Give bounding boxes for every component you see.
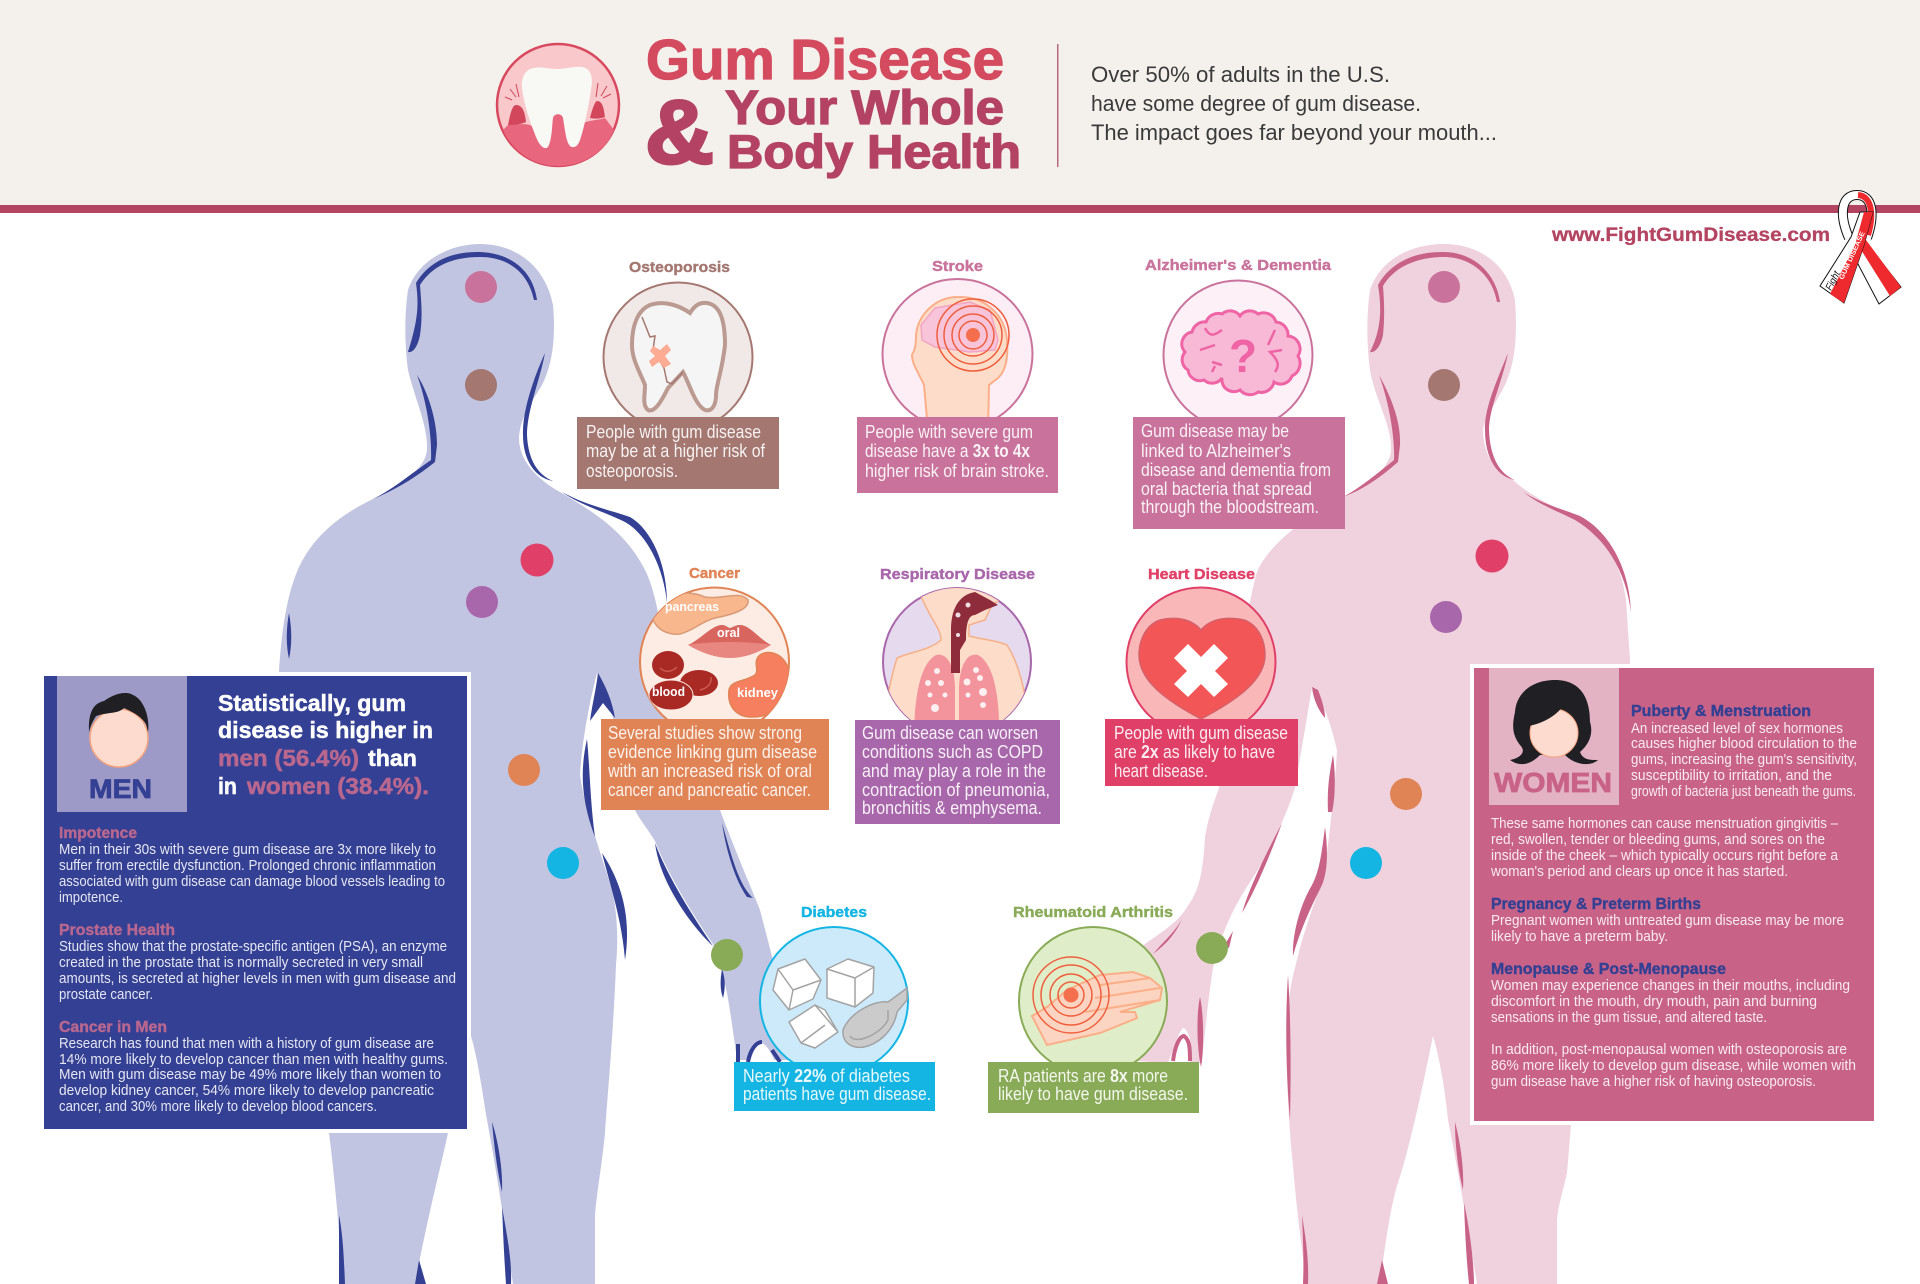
title: Your Whole: [725, 82, 1004, 135]
icon: man avatar: MEN: [89, 774, 152, 804]
text: prostate health: prostate cancer.: [59, 987, 153, 1003]
text: menopause: Women may experience changes in their mouths, including: [1491, 978, 1850, 994]
icon: man avatar: [57, 676, 187, 812]
icon: woman avatar: [1489, 668, 1619, 805]
text: puberty and menstruation: gums, increasing the gum's sensitivity,: [1631, 752, 1857, 768]
text: prostate health: Studies show that the prostate-specific antigen (PSA), an enzyme: [59, 939, 447, 955]
panel: respiratory disease: Respiratory Disease: [880, 566, 1035, 583]
panel: cancer: oral: [717, 625, 740, 640]
text: menstruation gingivitis: [1490, 816, 1839, 880]
text: pregnancy: Pregnancy & Preterm Births: [1491, 896, 1701, 913]
panel: rheumatoid arthritis: RA patients are 8x more: [998, 1066, 1168, 1086]
text: puberty and menstruation: growth of bacteria just beneath the gums.: [1631, 784, 1856, 800]
icon: tooth with receding gums: [497, 44, 619, 166]
text: puberty and menstruation: An increased level of sex hormones: [1631, 721, 1843, 737]
panel: alzheimer's and dementia: [1133, 257, 1345, 529]
text: prostate health: amounts, is secreted at higher levels in men with gum disease and: [59, 971, 456, 987]
panel: stroke: [857, 258, 1058, 493]
panel: stroke: disease have a 3x to 4x: [865, 441, 1030, 461]
panel: respiratory disease: conditions such as COPD: [862, 742, 1043, 762]
panel: alzheimer's and dementia: disease and dementia from: [1141, 460, 1331, 480]
text: menopause: Menopause & Post-Menopause: [1491, 961, 1726, 978]
text: prostate health: [59, 922, 456, 1003]
panel: alzheimer's and dementia: linked to Alzheimer's: [1141, 441, 1291, 461]
panel: diabetes: Nearly 22% of diabetes: [743, 1066, 910, 1086]
text: menopause: sensations in the gum tissue, and altered taste.: [1491, 1010, 1767, 1026]
text: puberty and menstruation: [1631, 703, 1857, 800]
panel: osteoporosis: osteoporosis.: [586, 461, 678, 481]
statistic heading: in: [218, 773, 237, 799]
tagline: have some degree of gum disease.: [1091, 91, 1421, 116]
panel: cancer: cancer and pancreatic cancer.: [608, 780, 811, 800]
statistic heading: men (56.4%): [218, 745, 359, 771]
icon: awareness ribbon: GUM DISEASE: [1838, 230, 1867, 281]
text: menopause: discomfort in the mouth, dry mouth, pain and burning: [1491, 994, 1817, 1010]
panel: diabetes: [734, 904, 935, 1111]
title: [645, 28, 1021, 183]
panel: respiratory disease: [855, 566, 1060, 824]
panel: osteoporosis: Osteoporosis: [629, 259, 730, 276]
panel: osteoporosis: People with gum disease: [586, 422, 761, 442]
title: &: [645, 83, 714, 183]
header band: [0, 0, 1920, 213]
text: cancer in men: Men with gum disease may be 49% more likely than women to: [59, 1067, 441, 1083]
text: cancer in men: Research has found that men with a history of gum disease are: [59, 1036, 434, 1052]
title: Body Health: [727, 125, 1021, 178]
panel: stroke: Stroke: [932, 258, 983, 275]
text: menstruation gingivitis: These same hormones can cause menstruation gingivitis –: [1491, 816, 1839, 832]
text: impotence: Men in their 30s with severe gum disease are 3x more likely to: [59, 842, 436, 858]
panel: women: [1470, 664, 1878, 1125]
text: pregnancy: likely to have a preterm baby.: [1491, 929, 1668, 945]
panel: respiratory disease: bronchitis & emphysema.: [862, 798, 1042, 818]
panel: diabetes: Diabetes: [801, 904, 867, 921]
text: impotence: impotence.: [59, 890, 123, 906]
panel: cancer: [601, 565, 829, 810]
panel: cancer: Cancer: [689, 565, 740, 582]
statistic heading: disease is higher in: [218, 717, 433, 743]
statistic heading: women (38.4%).: [246, 773, 429, 799]
text: prostate health: Prostate Health: [59, 922, 175, 939]
panel: alzheimer's and dementia: ?: [1229, 330, 1257, 382]
panel: cancer: with an increased risk of oral: [607, 761, 812, 781]
panel: cancer: kidney: [737, 685, 779, 700]
text: menstruation gingivitis: red, swollen, tender or bleeding gums, and sores on the: [1491, 832, 1825, 848]
text: menopause: [1491, 961, 1856, 1090]
text: cancer in men: cancer, and 30% more likely to develop blood cancers.: [59, 1099, 377, 1115]
panel: heart disease: heart disease.: [1114, 761, 1208, 781]
text: impotence: suffer from erectile dysfunction. Prolonged chronic inflammation: [59, 858, 436, 874]
title: Gum Disease: [646, 28, 1004, 92]
statistic heading: than: [368, 745, 417, 771]
tagline: [1091, 62, 1497, 145]
text: puberty and menstruation: susceptibility to irritation, and the: [1631, 768, 1832, 784]
panel: cancer: evidence linking gum disease: [608, 742, 817, 762]
panel: alzheimer's and dementia: oral bacteria that spread: [1141, 479, 1312, 499]
female body silhouette: [1100, 244, 1631, 1284]
panel: rheumatoid arthritis: Rheumatoid Arthritis: [1013, 904, 1173, 921]
text: impotence: Impotence: [59, 825, 137, 842]
panel: heart disease: People with gum disease: [1114, 723, 1288, 743]
panel: alzheimer's and dementia: Gum disease may be: [1141, 421, 1289, 441]
panel: osteoporosis: [577, 259, 779, 489]
icon: awareness ribbon: Fight: [1824, 269, 1843, 292]
text: cancer in men: Cancer in Men: [59, 1019, 167, 1036]
text: pregnancy: [1491, 896, 1844, 945]
statistic heading: [218, 690, 433, 799]
panel: stroke: higher risk of brain stroke.: [865, 461, 1049, 481]
panel: alzheimer's and dementia: Alzheimer's & Dementia: [1145, 257, 1332, 274]
panel: respiratory disease: contraction of pneumonia,: [862, 780, 1050, 800]
text: cancer in men: develop kidney cancer, 54% more likely to develop pancreatic: [59, 1083, 434, 1099]
panel: cancer: pancreas: [665, 599, 719, 614]
panel: rheumatoid arthritis: [988, 904, 1199, 1113]
text: pregnancy: Pregnant women with untreated gum disease may be more: [1491, 913, 1844, 929]
marker dots: women: [1196, 271, 1508, 964]
panel: cancer: Several studies show strong: [608, 723, 802, 743]
website url: www.FightGumDisease.com: [1551, 225, 1830, 246]
panel: respiratory disease: Gum disease can worsen: [862, 723, 1038, 743]
statistic heading: Statistically, gum: [218, 690, 406, 716]
icon: awareness ribbon: [1820, 195, 1901, 304]
text: menopause: In addition, post-menopausal women with osteoporosis are: [1491, 1042, 1847, 1058]
text: menstruation gingivitis: woman's period and clears up once it has started.: [1490, 864, 1788, 880]
text: puberty and menstruation: causes higher blood circulation to the: [1631, 736, 1857, 752]
male body silhouette: [279, 244, 800, 1284]
text: menopause: gum disease have a higher risk of having osteoporosis.: [1491, 1074, 1816, 1090]
text: impotence: [59, 825, 445, 906]
text: cancer in men: 14% more likely to develop cancer than men with healthy gums.: [59, 1052, 448, 1068]
tagline: Over 50% of adults in the U.S.: [1091, 62, 1390, 87]
text: cancer in men: [59, 1019, 448, 1115]
panel: respiratory disease: and may play a role in the: [862, 761, 1046, 781]
panel: rheumatoid arthritis: likely to have gum disease.: [998, 1084, 1188, 1104]
icon: woman avatar: WOMEN: [1494, 767, 1612, 798]
text: menopause: 86% more likely to develop gum disease, while women with: [1491, 1058, 1856, 1074]
tagline: The impact goes far beyond your mouth...: [1091, 120, 1497, 145]
panel: cancer: blood: [652, 684, 685, 699]
marker dots: men: [465, 271, 743, 971]
panel: stroke: People with severe gum: [865, 422, 1033, 442]
text: prostate health: created in the prostate that is normally secreted in very small: [59, 955, 423, 971]
panel: alzheimer's and dementia: through the bloodstream.: [1141, 497, 1319, 517]
panel: heart disease: [1105, 566, 1298, 786]
text: puberty and menstruation: Puberty & Menstruation: [1631, 703, 1811, 720]
panel: men: [40, 672, 471, 1133]
text: menstruation gingivitis: inside of the cheek – which typically occurs right before a: [1491, 848, 1839, 864]
panel: heart disease: Heart Disease: [1148, 566, 1255, 583]
panel: heart disease: are 2x as likely to have: [1114, 742, 1275, 762]
text: impotence: associated with gum disease can damage blood vessels leading to: [59, 874, 445, 890]
panel: diabetes: patients have gum disease.: [743, 1084, 931, 1104]
panel: osteoporosis: may be at a higher risk of: [586, 441, 766, 461]
